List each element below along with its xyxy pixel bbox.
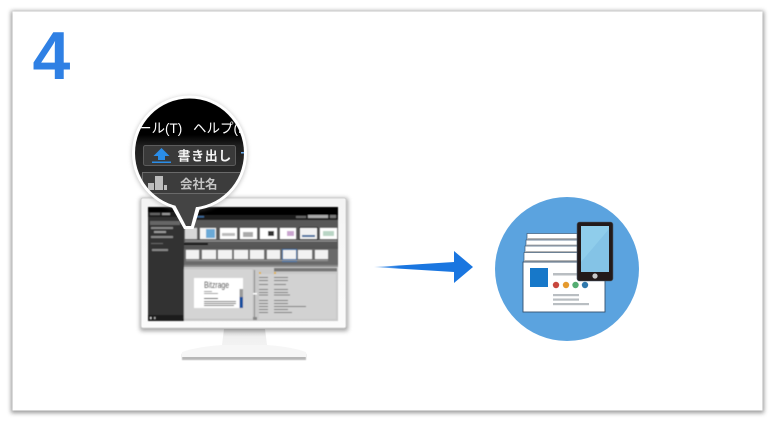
export button: 書き出し [178,148,232,164]
lens shadow [132,96,248,212]
card stack [524,234,587,272]
sidebar [148,217,184,321]
lens content: ヘルプ(H) [193,121,252,136]
template gallery row [184,220,338,246]
menu text: ール(T) [138,121,182,136]
arrow [374,251,473,283]
icon: business cards and smartphone in blue circle [495,197,639,341]
icon: desktop monitor with software screen [140,198,348,360]
layout thumbnails row [184,246,338,265]
blue circle [495,197,639,341]
software screen [148,207,338,321]
card preview area [184,265,338,321]
front card [523,262,605,312]
business card [194,278,243,308]
monitor stand [182,329,306,360]
property table [259,268,337,319]
lens content [135,98,244,208]
lens outline [132,96,247,210]
toolbar [148,212,338,220]
smartphone [577,222,613,281]
company name row: 会社名 [180,176,218,192]
pointer fill [174,203,197,226]
monitor bezel [140,198,348,331]
business card: Bitzrage [204,280,229,290]
step number: 4 [32,18,70,94]
pointer outline [170,204,200,229]
magnifier callout [130,95,252,229]
